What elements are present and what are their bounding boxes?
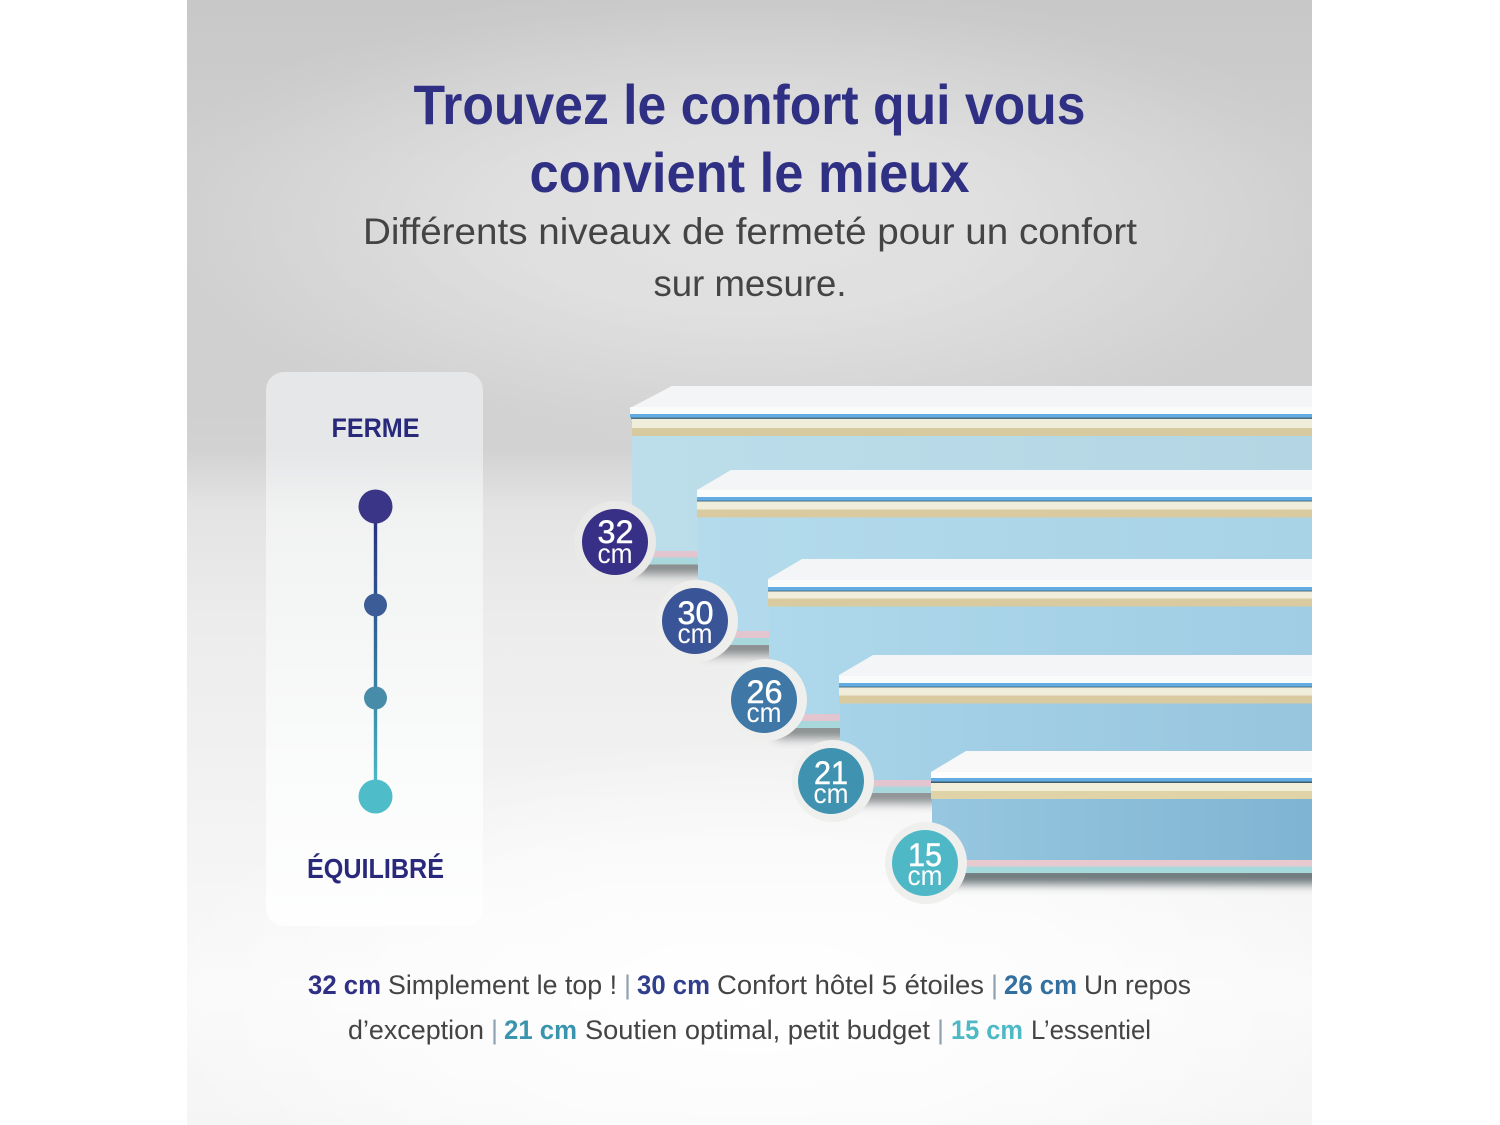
- footer text: L’essentiel: [1031, 1015, 1151, 1045]
- footer text: 21 cm: [504, 1015, 577, 1045]
- badge: 15 cm: [885, 822, 967, 904]
- title: convient le mieux: [530, 141, 970, 204]
- subtitle: Différents niveaux de fermeté pour un confort: [363, 211, 1138, 252]
- badge: 21 cm: [792, 740, 874, 822]
- title: Trouvez le confort qui vous: [414, 73, 1086, 136]
- badge: 32 cm: cm: [598, 538, 632, 569]
- dot: second level: [364, 594, 387, 616]
- footer text: Soutien optimal, petit budget: [585, 1015, 931, 1045]
- dot: balanced: [358, 780, 392, 814]
- footer text: 32 cm: [308, 970, 381, 1000]
- badge: 21 cm: cm: [814, 778, 848, 809]
- badge: 15 cm: cm: [908, 860, 942, 891]
- mattress stack: [630, 386, 1345, 884]
- badge: 30 cm: cm: [678, 618, 712, 649]
- subtitle: sur mesure.: [654, 263, 846, 304]
- title: [414, 73, 1086, 204]
- footer text: 26 cm: [1004, 970, 1077, 1000]
- subtitle: [363, 211, 1138, 304]
- footer text: [308, 970, 1191, 1045]
- footer text: 15 cm: [951, 1015, 1023, 1045]
- footer text: Simplement le top !: [388, 970, 617, 1000]
- footer text: |: [491, 1015, 498, 1045]
- dot: third level: [364, 686, 387, 710]
- badge: 30 cm: 30: [678, 595, 714, 631]
- badge: 15 cm: 15: [908, 837, 942, 873]
- mattress: 30 cm: [697, 470, 1312, 655]
- badge: 32 cm: 32: [598, 514, 634, 550]
- badge: 26 cm: 26: [746, 674, 782, 710]
- footer text: |: [991, 970, 998, 1000]
- mattress: 15 cm: [931, 751, 1345, 884]
- label: équilibré: ÉQUILIBRÉ: [307, 853, 444, 884]
- badge: 21 cm: 21: [814, 755, 848, 791]
- badge: 30 cm: [656, 580, 738, 662]
- mattress: 21 cm: [839, 655, 1312, 803]
- scale line: [374, 510, 377, 795]
- footer text: |: [937, 1015, 944, 1045]
- background: [187, 0, 1312, 1125]
- footer text: d’exception: [348, 1015, 484, 1045]
- mattress: 26 cm: [768, 559, 1312, 738]
- panel: firmness scale: [266, 372, 483, 926]
- footer text: |: [624, 970, 631, 1000]
- mattress: 32 cm: [630, 386, 1312, 574]
- label: ferme: FERME: [332, 413, 420, 443]
- badge: 32 cm: [574, 501, 656, 583]
- footer text: Confort hôtel 5 étoiles: [717, 970, 984, 1000]
- badge: 26 cm: cm: [746, 697, 782, 728]
- footer text: Un repos: [1084, 970, 1191, 1000]
- badge: 26 cm: [725, 659, 807, 741]
- footer text: 30 cm: [637, 970, 710, 1000]
- dot: firmest: [358, 490, 392, 524]
